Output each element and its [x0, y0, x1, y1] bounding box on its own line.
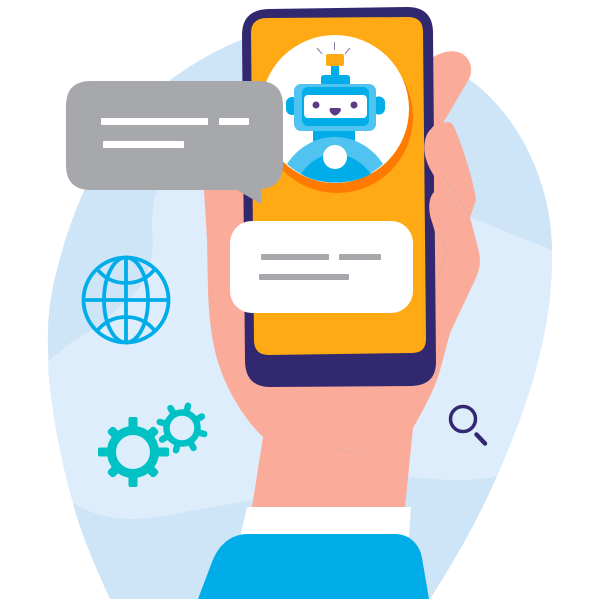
robot ear connectors [297, 102, 374, 110]
icon: small gear [160, 406, 204, 450]
robot body [287, 137, 383, 182]
icon: magnifying glass [450, 406, 485, 444]
background lighter region [48, 120, 552, 519]
robot head inner [302, 87, 369, 126]
sleeve [198, 534, 429, 599]
hand and arm [204, 51, 480, 507]
chin crease [334, 447, 363, 452]
robot right ear [372, 96, 385, 114]
phone body [242, 7, 436, 387]
avatar orange shadow [261, 41, 413, 193]
gray speech bubble [66, 81, 283, 204]
robot neck [313, 124, 355, 144]
robot mouth [330, 108, 341, 116]
robot head cap [321, 75, 350, 86]
robot left ear [286, 97, 298, 115]
robot head outer [294, 84, 376, 131]
robot antenna stem [331, 66, 339, 76]
robot chest [301, 154, 371, 182]
robot antenna light [326, 54, 344, 66]
robot right eye [350, 102, 358, 108]
gray bubble text lines [101, 118, 249, 148]
finger crease lines [437, 173, 469, 278]
robot chest button [323, 145, 347, 169]
avatar white circle [261, 35, 409, 183]
white speech bubble [230, 221, 413, 313]
robot left eye [312, 102, 320, 108]
icon: large gear [98, 417, 169, 487]
background blob [48, 32, 552, 599]
white bubble text lines [259, 254, 381, 280]
finger lumps over phone [424, 122, 476, 278]
chatbot avatar [261, 35, 413, 193]
phone screen [251, 17, 426, 355]
robot face [304, 95, 367, 118]
robot signal rays [317, 42, 350, 54]
shirt cuff [240, 507, 411, 537]
icon: globe [84, 257, 168, 343]
